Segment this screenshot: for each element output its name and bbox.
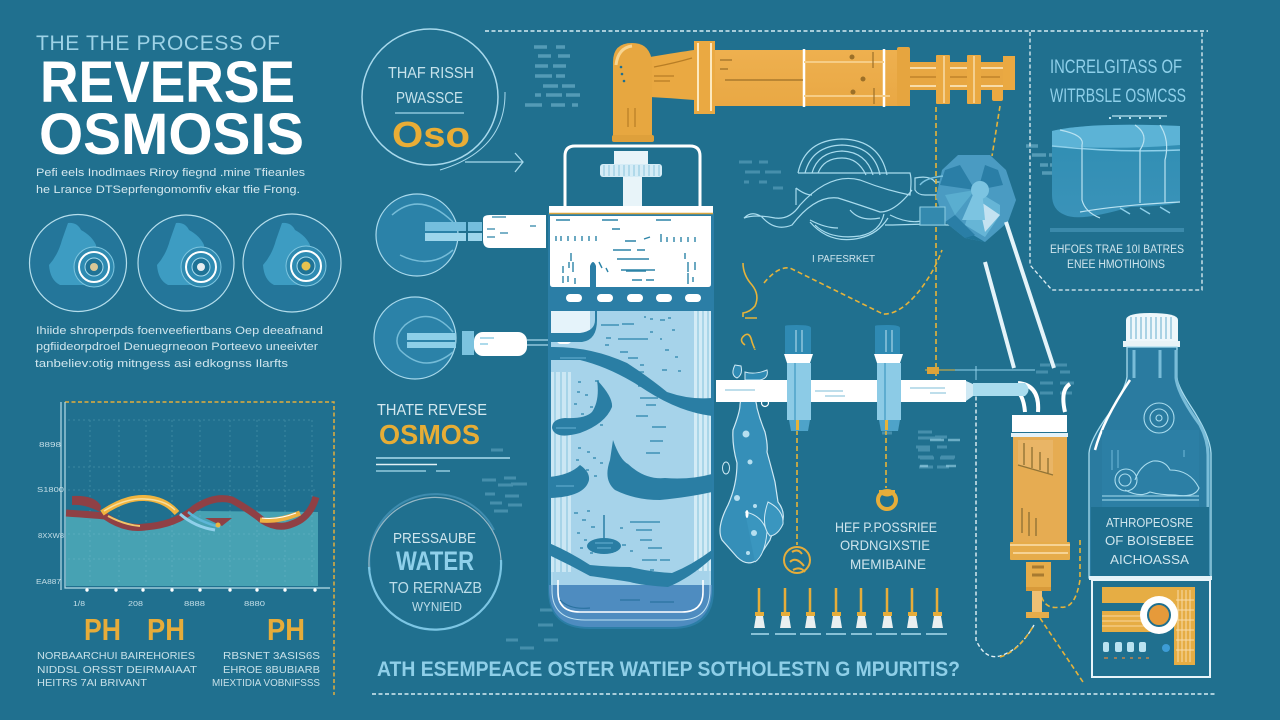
bottle: OF BOISEBEE [1105,534,1194,548]
icon row: three membrane circles [30,214,341,312]
icon: gold emblem [784,547,810,573]
bottle label band [1091,507,1209,577]
title [36,32,304,167]
inset heading [1050,57,1186,107]
chart frame [65,402,334,695]
water specks [574,317,681,570]
callout: top circle: Oso [392,114,470,155]
callout: pressure water: TO RERNAZB [389,580,482,597]
callout: top circle [362,29,505,170]
valve 2 [874,325,903,431]
membrane caption: ORDNGIXSTIE [840,537,930,553]
callout: pressure water: WATER [396,546,474,576]
mid label: osmos: OSMOS [379,419,480,450]
callout: top circle: THAF RISSH [388,65,474,82]
chart: pH levels: 8880 [244,599,265,608]
icon: gold ring [878,490,896,509]
valve 1 [784,325,813,431]
intro text: he Lrance DTSeprfengomomfiv ekar tfie Frong. [36,184,300,196]
callout: pressure water: WYNIEID [412,599,462,614]
membrane caption: HEF P.POSSRIEE [835,519,937,535]
bottle: AICHOASSA [1110,553,1190,567]
panel: left inlet gauge 2 [374,297,550,379]
water [549,311,713,629]
pH labels [84,612,305,647]
chart: pH levels: 208 [128,599,143,608]
nozzle row [751,588,947,634]
gauge tap [925,366,1035,380]
intro text: Pefi eels Inodlmaes Riroy fiegnd .mine Tfieanles [36,167,306,179]
dashed return line [976,390,1034,657]
bottle label panel [1092,580,1210,677]
mid label: osmos [376,402,510,471]
gold filter cartridge [1010,415,1070,618]
inset heading: WITRBSLE OSMCSS [1050,86,1186,107]
squiggle icons [742,263,757,349]
chart: pH levels: 8898 [39,440,61,449]
chart: pH levels: 8XXW8 [38,531,64,540]
inset heading: INCRELGITASS OF [1050,57,1182,78]
gem valve [920,155,1016,242]
membrane caption: MEMIBAINE [850,556,926,572]
title line: osmosis: OSMOSIS [39,102,304,167]
bottle cap [1126,313,1178,341]
arrow [465,153,523,172]
bottom banner question: ATH ESEMPEACE OSTER WATIEP SOTHOLESTN G MPURITIS? [377,658,960,681]
intro text [36,167,306,196]
water bands [549,311,712,587]
callout: top circle: PWASSCE [396,90,463,107]
wave series: blue [180,514,215,530]
handle frame [565,146,700,206]
chart notes right: EHROE 8BUBIARB [223,665,320,676]
wave series: gold [102,498,177,513]
inset caption: EHFOES TRAE 10I BATRES [1050,244,1184,256]
main filtration cylinder [548,146,714,629]
pH labels: PH [84,612,121,647]
chart: pH levels: S1800 [37,485,64,494]
panel: left inlet gauge 1 [376,194,546,276]
distribution pipe [716,325,1035,431]
cylinder body [548,213,714,629]
chart axes [61,402,330,590]
pH labels: PH [147,612,185,647]
chart notes right [212,651,320,689]
chart: pH levels [36,402,334,695]
description text: pgfiideorpdroel Denuegrneoon Porteevo uneeivter [36,341,318,353]
support rods [985,222,1054,368]
gold dashed connectors [764,106,1083,682]
chart notes left: NORBAARCHUI BAIREHORIES [37,651,195,662]
chart notes left: HEITRS 7AI BRIVANT [37,678,147,689]
chart: pH levels: EA887 [36,577,61,586]
pH labels: PH [267,612,305,647]
chart notes left [37,651,197,689]
inset caption: ENEE HMOTIHOINS [1067,259,1165,271]
chart notes right: RBSNET 3ASIS6S [223,651,320,662]
droplets blob [720,365,783,563]
chart: pH levels: 1/8 [73,599,85,608]
coil label: I PAFESRKET [812,254,875,265]
chart notes left: NIDDSL ORSST DEIRMAIAAT [37,665,197,676]
bottle [1089,313,1212,677]
callout: pressure water [369,494,501,630]
description text: Ihiide shroperpds foenveefiertbans Oep deeafnand [36,325,323,337]
inset frame [1030,32,1202,290]
side stripes [551,372,571,572]
icon: membrane 2 [138,215,234,311]
top cap [549,206,713,213]
title kicker: THE THE PROCESS OF [36,32,280,55]
chart notes right: MIEXTIDIA VOBNIFSSS [212,678,320,689]
small text dashes [525,47,1061,173]
description text: tanbeliev:otig mitngess asi edkognss Ilarfts [35,358,289,370]
mid label: osmos: THATE REVESE [377,402,487,419]
callout: pressure water: PRESSAUBE [393,530,476,547]
bottle: ATHROPEOSRE [1106,516,1193,530]
axis ticks and labels [85,588,317,592]
gold inlet pipe [612,41,1015,142]
inset: membrane tub [1030,32,1202,290]
bottle contents [1102,430,1199,507]
chart: pH levels: 8888 [184,599,205,608]
icon: membrane 1 [30,214,126,312]
title line: reverse: REVERSE [40,50,295,115]
upper white chamber [550,216,711,287]
wave series: red [72,496,101,512]
chart area [66,511,318,586]
t-handle [600,151,662,207]
bottle glass [1089,347,1211,578]
membrane caption [835,519,937,572]
coil diagram [744,139,950,240]
icon: membrane 3 [243,214,341,312]
tub illustration [1052,125,1180,217]
inset caption [1050,244,1184,271]
port row [566,294,701,302]
description text [35,325,323,370]
